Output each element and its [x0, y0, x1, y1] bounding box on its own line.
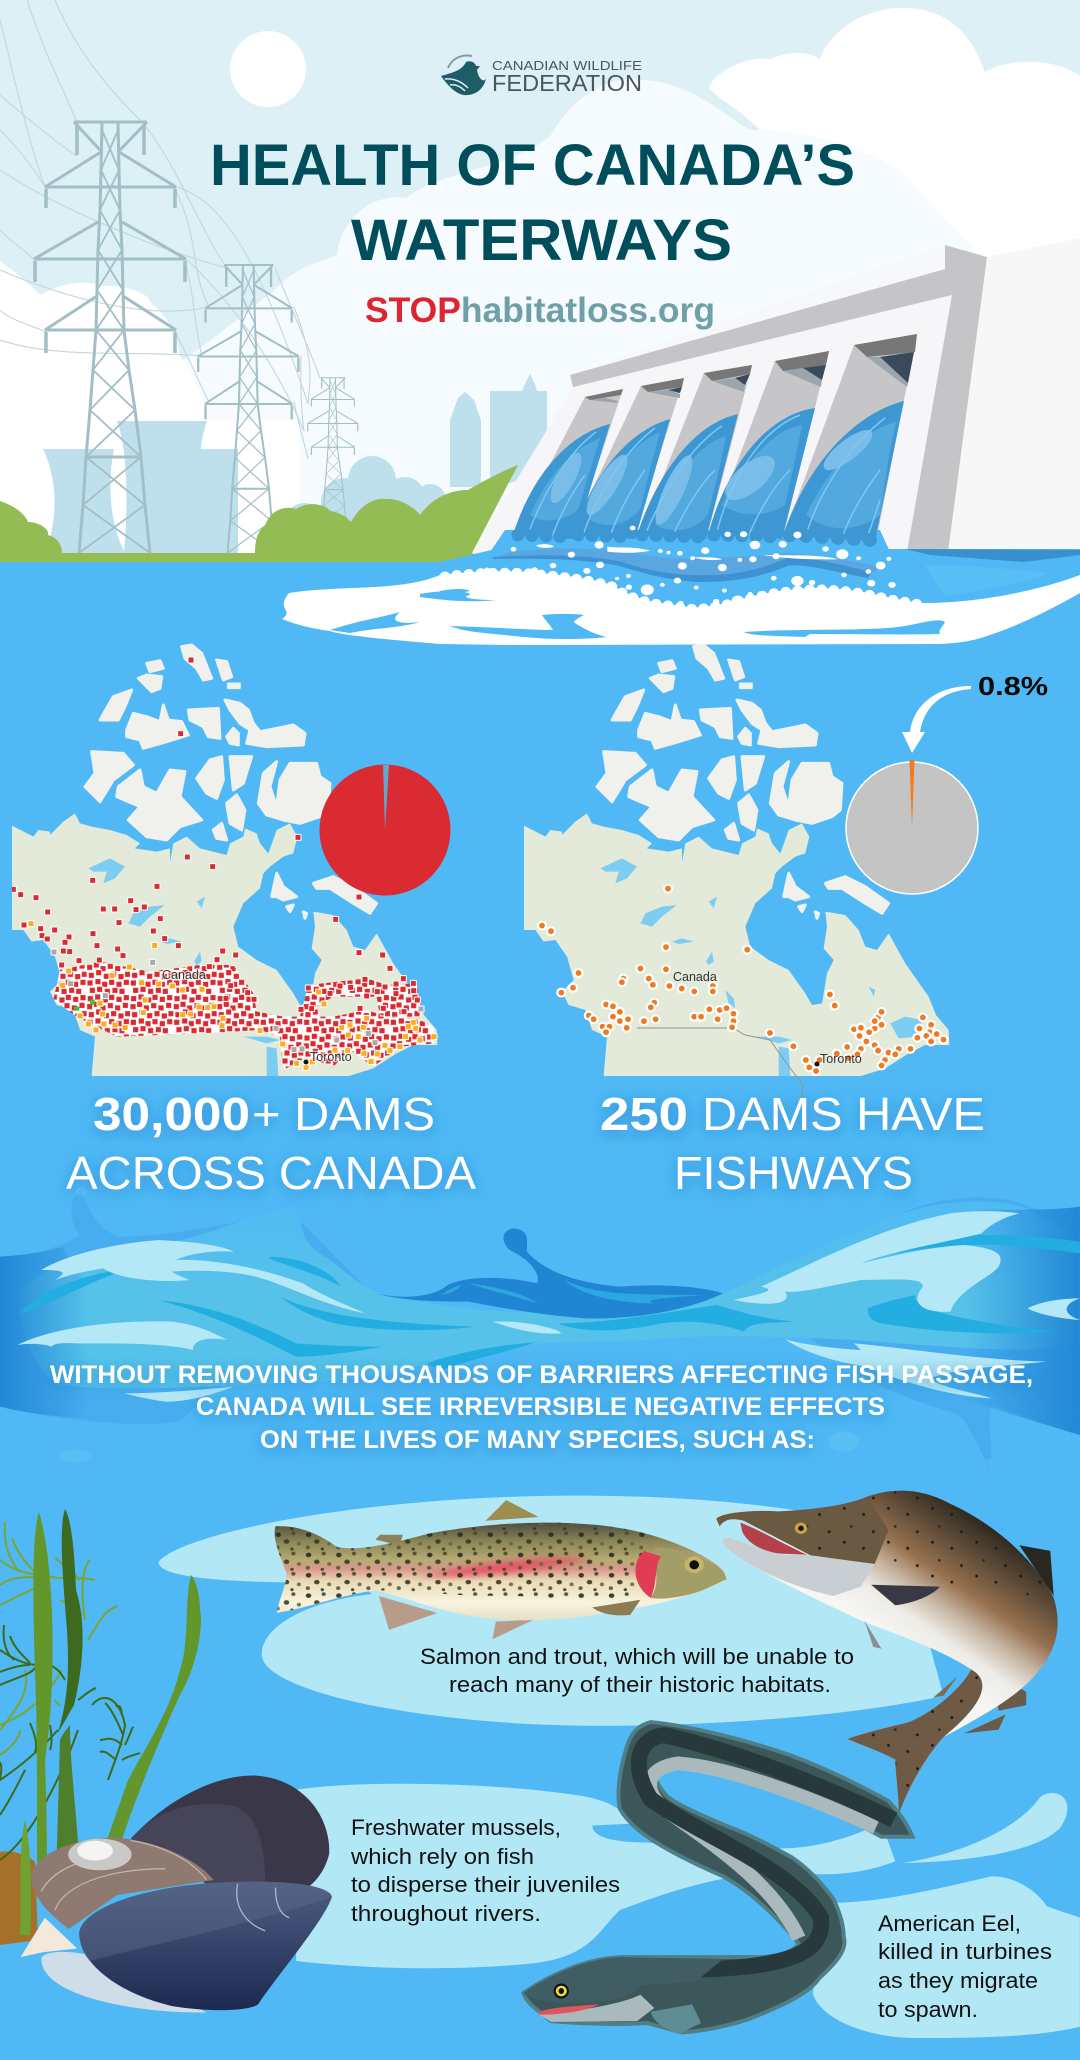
blue mussel highlight: [79, 1882, 332, 1961]
transmission tower 2: [198, 265, 299, 553]
trout pectoral fin: [592, 1600, 640, 1615]
trout head: [651, 1547, 727, 1599]
dark center wave: [375, 1228, 723, 1319]
water shadow right of dam: [905, 549, 1080, 562]
title: WATERWAYS: [351, 208, 732, 273]
caption: American eel: killed in turbines: [878, 1939, 1052, 1964]
feathery branches light: [0, 1522, 118, 1755]
wave illustration: [0, 1188, 1080, 1468]
salmon eye: [795, 1523, 807, 1534]
salmon head: [716, 1496, 888, 1564]
title: [210, 133, 855, 273]
wave highlights: [17, 1211, 1080, 1402]
mussels: [21, 1775, 332, 2010]
eel: [523, 1722, 913, 2034]
clam umbo: [68, 1839, 132, 1870]
salmon: [716, 1491, 1058, 1814]
trout body: [275, 1523, 727, 1620]
caption: freshwater mussels: which rely on fish: [350, 1844, 534, 1869]
salmon tail section: [847, 1669, 982, 1814]
main wave body: [19, 1201, 1080, 1388]
caption: freshwater mussels: Freshwater mussels,: [351, 1815, 561, 1840]
clam shell rings: [41, 1841, 207, 1910]
right edge shading: [964, 1207, 1080, 1435]
eel body outline: [523, 1722, 913, 2032]
caption: freshwater mussels: to disperse their juveniles: [351, 1872, 620, 1897]
dam: [472, 238, 1080, 553]
caption: American eel: to spawn.: [878, 1997, 978, 2022]
blob behind eel: [813, 1876, 1080, 2038]
wave mid-blue stripes: [21, 1235, 1080, 1370]
border line: [637, 1028, 803, 1110]
salmon fins: [1019, 1545, 1054, 1596]
dark mussel highlight: [131, 1804, 265, 1886]
map labels right: Canada: [673, 970, 717, 984]
left edge shading: [0, 1247, 90, 1418]
dam markers: [10, 657, 437, 1070]
lighter water patch: [925, 565, 1048, 596]
caption: American eel: American Eel,: [878, 1911, 1021, 1936]
pie chart: 0.8 percent: [846, 760, 978, 894]
wave left under-layer: [0, 1190, 372, 1424]
white cloud upper right: [709, 8, 1080, 262]
salmon spots: [785, 1491, 1054, 1814]
heading: 30,000+ dams: [66, 1088, 476, 1199]
trout red stripe: [420, 1558, 592, 1577]
dam end column: [907, 245, 987, 552]
eel head: [523, 1957, 723, 2003]
caption: American eel: as they migrate: [878, 1968, 1038, 1993]
foam holes: [330, 589, 945, 639]
icon: bird on wave: [441, 56, 486, 95]
spillway water 2: [573, 419, 670, 539]
caption: freshwater mussels: [350, 1815, 620, 1926]
pool surface: [440, 548, 1080, 600]
feathery branches dark: [0, 1625, 140, 1860]
dam top face: [570, 245, 945, 375]
call to action text: [50, 1361, 1033, 1454]
green shrubs and riverbank: [0, 465, 518, 562]
salmon mouth: [740, 1523, 807, 1555]
dark mussel: [131, 1775, 329, 1895]
blue mussel: [79, 1882, 332, 2010]
dam front body: [472, 295, 952, 553]
white shell fragment: [21, 1918, 77, 1957]
spillway water 5: [783, 401, 904, 541]
seagrass blade lower: [56, 1725, 80, 1880]
eel pectoral fin: [651, 2004, 701, 2034]
power lines: [0, 0, 320, 459]
blob behind salmon and trout: [158, 1496, 944, 1726]
aquatic plants: [0, 1509, 201, 1935]
map: dams with fishways: [524, 645, 1048, 1110]
map base left: [12, 645, 437, 1076]
pale cloud bank: [148, 79, 1080, 570]
background: sky: [0, 0, 1080, 570]
soil clod: [0, 1851, 38, 1945]
map labels right: Toronto: [820, 1052, 862, 1066]
logo wordmark: FEDERATION: [492, 70, 642, 96]
website url: STOPhabitatloss.org: [365, 291, 715, 330]
transmission tower 1: [34, 122, 186, 553]
trout spots: [275, 1523, 647, 1613]
trout eye: [685, 1557, 704, 1573]
spillway water 4: [708, 408, 815, 539]
pie chart: red share: [320, 764, 450, 896]
sun: [230, 31, 306, 107]
droplets: [61, 1188, 992, 1465]
dark current band: [493, 555, 872, 582]
mussel shadow: [41, 1952, 207, 2013]
species illustrations: [41, 1491, 1080, 2038]
caption: salmon and trout: [420, 1644, 854, 1697]
lighter current fill: [493, 549, 880, 580]
caption: American eel: [878, 1911, 1052, 2022]
map labels left: Toronto: [310, 1050, 352, 1064]
logo wordmark: CANADIAN WILDLIFE: [492, 58, 642, 73]
seagrass blade front: [20, 1820, 31, 1935]
seagrass blade curved: [107, 1575, 201, 1845]
wave right under-layer: [758, 1198, 1080, 1468]
map labels right: [673, 970, 862, 1066]
map labels left: Canada: [162, 968, 206, 982]
dam top beam: [570, 269, 952, 387]
transmission tower 3: [307, 378, 358, 522]
heading: 30,000+ dams: 30,000: [93, 1088, 250, 1140]
map labels left: [162, 968, 352, 1064]
foam scalloped edge: [445, 573, 925, 610]
arrow to pie chart: [902, 686, 971, 753]
turbulent water below dam: [282, 526, 1080, 645]
trout fins: [375, 1500, 539, 1639]
foam bubbles: [484, 526, 896, 606]
blob splash: [902, 1793, 1067, 1863]
caption: freshwater mussels: throughout rivers.: [351, 1901, 541, 1926]
clam shell: [31, 1838, 213, 1929]
heading: 250 dams have fishways: DAMS HAVE: [702, 1088, 985, 1140]
seagrass blade 1: [33, 1512, 53, 1880]
fishway markers: [537, 884, 949, 1076]
call to action text: ON THE LIVES OF MANY SPECIES, SUCH AS:: [260, 1426, 815, 1454]
trout: [275, 1500, 727, 1639]
logo: Canadian Wildlife Federation: [441, 56, 642, 96]
eel eye: [554, 1984, 569, 1999]
heading: 250 dams have fishways: 250: [600, 1088, 688, 1140]
eel dark stripe: [606, 1735, 894, 1976]
gate shadows: [585, 334, 917, 403]
heading: 250 dams have fishways: [600, 1088, 985, 1199]
pool backing behind spillways: [490, 530, 890, 552]
eel lower jaw: [537, 1995, 654, 2022]
call to action text: CANADA WILL SEE IRREVERSIBLE NEGATIVE EFFECTS: [196, 1393, 885, 1421]
white cloud left: [0, 261, 300, 570]
salmon pectoral fin: [871, 1585, 940, 1605]
spillway water 3: [637, 414, 738, 539]
inner center wave stripes: [441, 1280, 702, 1303]
caption: salmon and trout: Salmon and trout, which will be unable to: [420, 1644, 854, 1669]
salmon jaw: [722, 1538, 875, 1596]
title: HEALTH OF CANADA’S: [210, 133, 855, 198]
caption: salmon and trout: reach many of their historic habitats.: [449, 1672, 831, 1697]
spillway water 1: [513, 424, 610, 539]
map: dams across Canada: [10, 645, 451, 1076]
call to action text: WITHOUT REMOVING THOUSANDS OF BARRIERS AFFECTING FISH PASSAGE,: [50, 1361, 1033, 1389]
heading: 250 dams have fishways: FISHWAYS: [674, 1147, 913, 1199]
city skyline and cooling towers: [43, 374, 547, 553]
water body: [0, 562, 1080, 2060]
eel mouth: [539, 2004, 599, 2015]
white foam: [282, 571, 1080, 645]
eel light stripe: [650, 1763, 876, 1938]
salmon body: [716, 1491, 1058, 1814]
dam right wall: [940, 238, 1080, 552]
percent label: 0.8%: [978, 671, 1048, 701]
trout gill: [635, 1551, 661, 1598]
logo wordmark: [492, 58, 642, 96]
map base right: [524, 645, 949, 1076]
seagrass blade dark: [58, 1509, 83, 1733]
heading: 30,000+ dams: + DAMS: [252, 1088, 435, 1140]
heading: 30,000+ dams: ACROSS CANADA: [66, 1147, 476, 1199]
blob behind mussels: [296, 1784, 895, 1968]
gate recesses: [513, 334, 917, 547]
